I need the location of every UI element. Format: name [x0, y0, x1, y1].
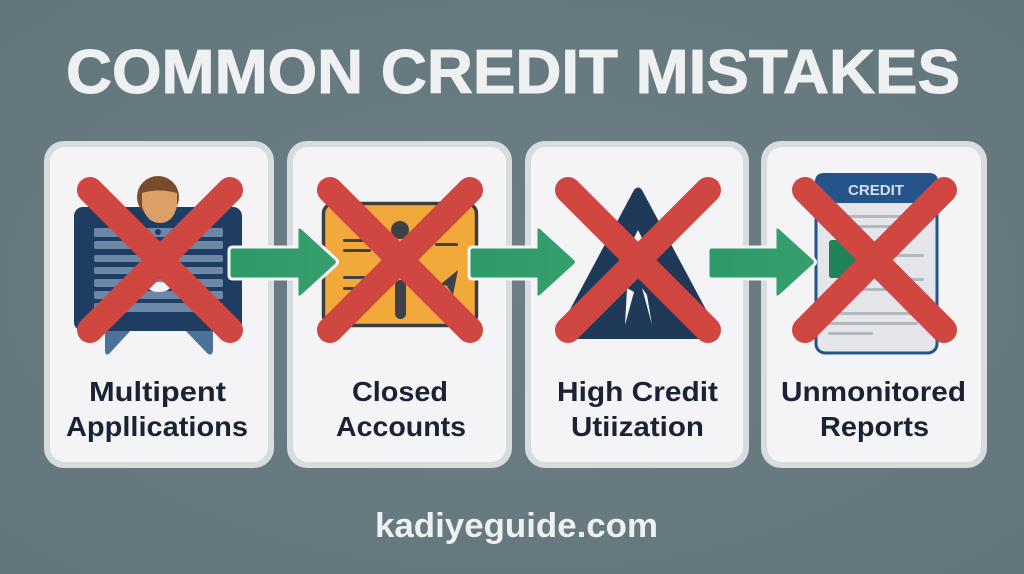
icon: red cross — [805, 190, 944, 330]
icon: warning triangle — [558, 188, 718, 339]
label: Multipent — [89, 376, 226, 407]
icon: credit report document: CREDIT — [848, 183, 904, 199]
label: Utiization — [571, 411, 704, 442]
panel: multiple applications — [44, 141, 274, 468]
label: High Credit — [557, 376, 718, 407]
label: Accounts — [336, 411, 466, 442]
label — [336, 376, 466, 442]
panel: closed accounts — [287, 141, 512, 468]
footer website: kadiyeguide.com — [375, 507, 658, 545]
panel: high credit utilization — [525, 141, 749, 468]
icon: red cross — [90, 190, 230, 330]
title: COMMON CREDIT MISTAKES — [66, 38, 960, 107]
icon: orange account card — [324, 204, 476, 326]
arrow: first to second — [229, 227, 338, 297]
label: Closed — [352, 376, 448, 407]
label: Reports — [820, 411, 929, 442]
arrow: second to third — [469, 227, 576, 297]
icon: red cross — [330, 190, 470, 330]
label: Appllications — [66, 411, 248, 442]
label — [557, 376, 718, 442]
label: Unmonitored — [781, 376, 966, 407]
arrow: third to fourth — [708, 227, 816, 297]
icon: red cross — [568, 190, 708, 330]
label — [66, 376, 248, 442]
icon: credit report document — [815, 173, 938, 353]
label — [781, 376, 966, 442]
icon: applicant on screen — [74, 176, 242, 355]
panel: unmonitored reports — [761, 141, 987, 468]
